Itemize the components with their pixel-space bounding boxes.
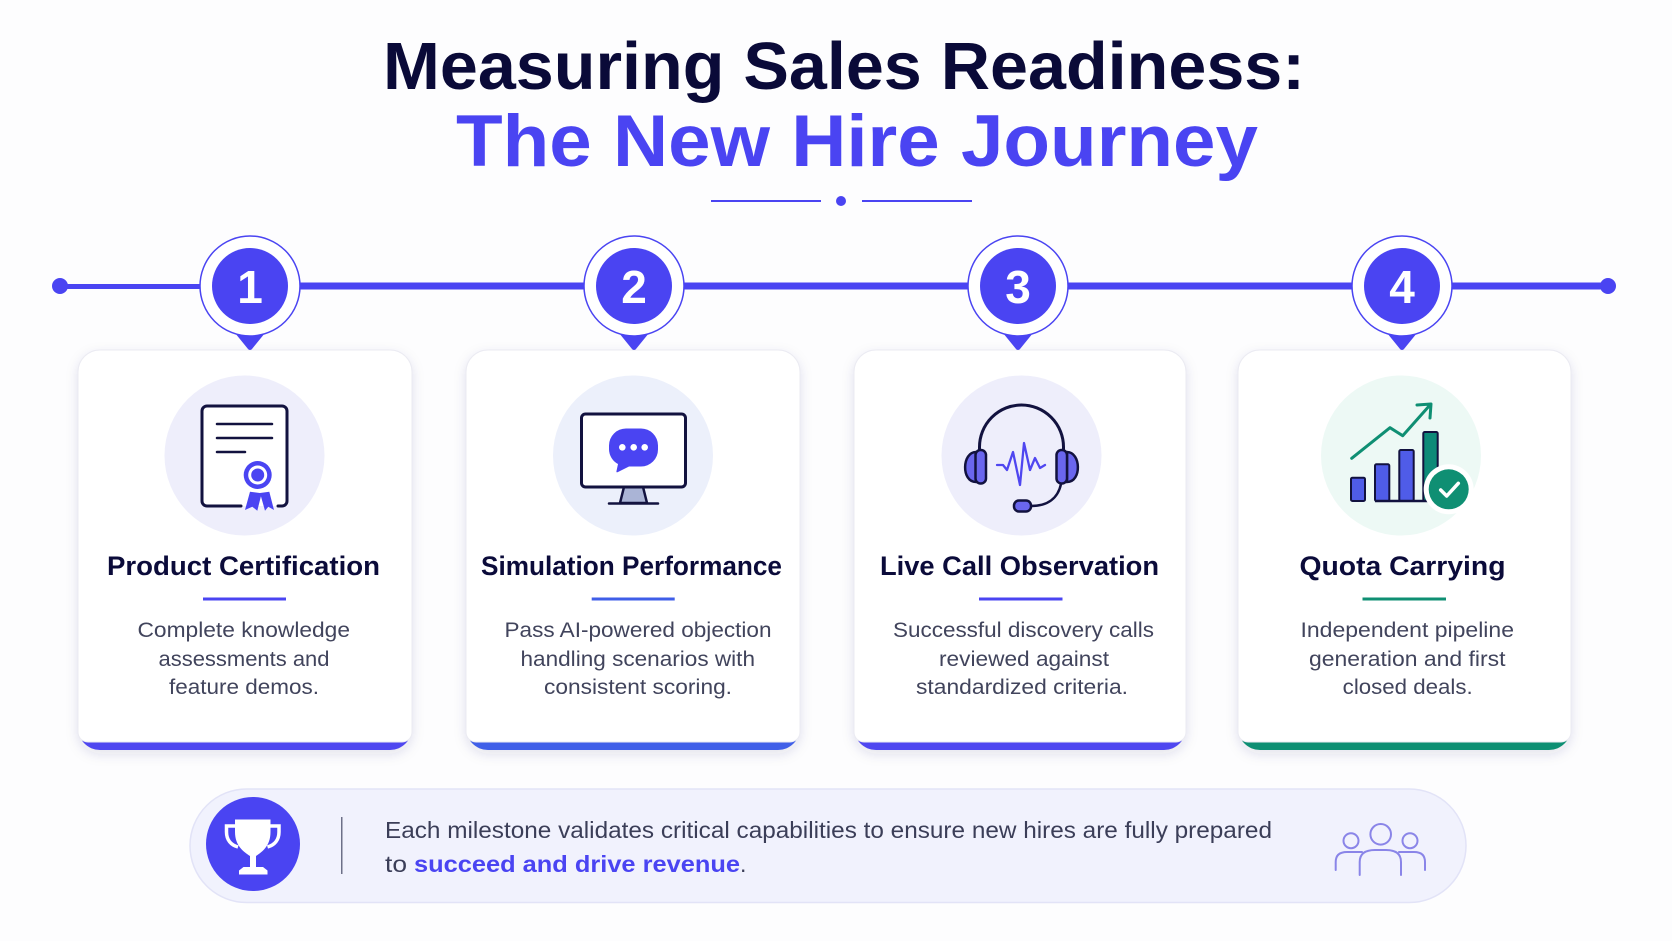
description <box>893 619 1154 699</box>
title: The New Hire Journey <box>456 101 1258 182</box>
step marker 2 <box>584 236 684 350</box>
card 3: live call observation <box>854 350 1186 750</box>
banner text: to <box>385 851 407 877</box>
icon: headset <box>942 376 1102 536</box>
description: Independent pipeline <box>1300 619 1514 642</box>
step marker 1: 1 <box>237 261 263 313</box>
description: generation and first <box>1309 648 1506 671</box>
description: consistent scoring. <box>544 676 732 699</box>
banner text: Each milestone validates critical capabilities to ensure new hires are fully prepared <box>385 817 1272 843</box>
description: handling scenarios with <box>520 648 755 671</box>
title <box>383 29 1305 182</box>
step marker 2: 2 <box>621 261 647 313</box>
icon: certificate <box>164 376 324 536</box>
icon: trophy <box>206 797 300 891</box>
heading: Live Call Observation <box>880 551 1159 581</box>
timeline line <box>52 278 1616 294</box>
step marker 3: 3 <box>1005 261 1031 313</box>
description <box>138 619 350 699</box>
description: Complete knowledge <box>138 619 350 642</box>
card 4: quota carrying <box>1238 350 1571 750</box>
description: reviewed against <box>939 648 1109 671</box>
description: closed deals. <box>1343 676 1473 699</box>
step marker 4 <box>1352 236 1452 350</box>
heading: Simulation Performance <box>481 551 782 581</box>
card 1: product certification <box>78 350 412 750</box>
description: feature demos. <box>169 676 319 699</box>
description: Pass AI-powered objection <box>504 619 772 642</box>
step marker 1 <box>200 236 300 350</box>
description: Successful discovery calls <box>893 619 1154 642</box>
icon: team <box>1336 824 1425 875</box>
heading: Quota Carrying <box>1300 551 1506 581</box>
description <box>504 619 772 699</box>
banner text <box>385 817 1272 877</box>
callout: summary banner <box>190 789 1466 902</box>
card 2: simulation performance <box>466 350 800 750</box>
banner text: . <box>740 851 746 877</box>
description: standardized criteria. <box>916 676 1128 699</box>
step marker 3 <box>968 236 1068 350</box>
description: assessments and <box>158 648 330 671</box>
icon: growth chart with check <box>1321 376 1481 536</box>
banner text: succeed and drive revenue <box>414 851 740 877</box>
step marker 4: 4 <box>1389 261 1415 313</box>
description <box>1300 619 1514 699</box>
title: Measuring Sales Readiness: <box>383 29 1305 104</box>
icon: monitor with chat bubble <box>553 376 713 536</box>
heading: Product Certification <box>107 551 380 581</box>
